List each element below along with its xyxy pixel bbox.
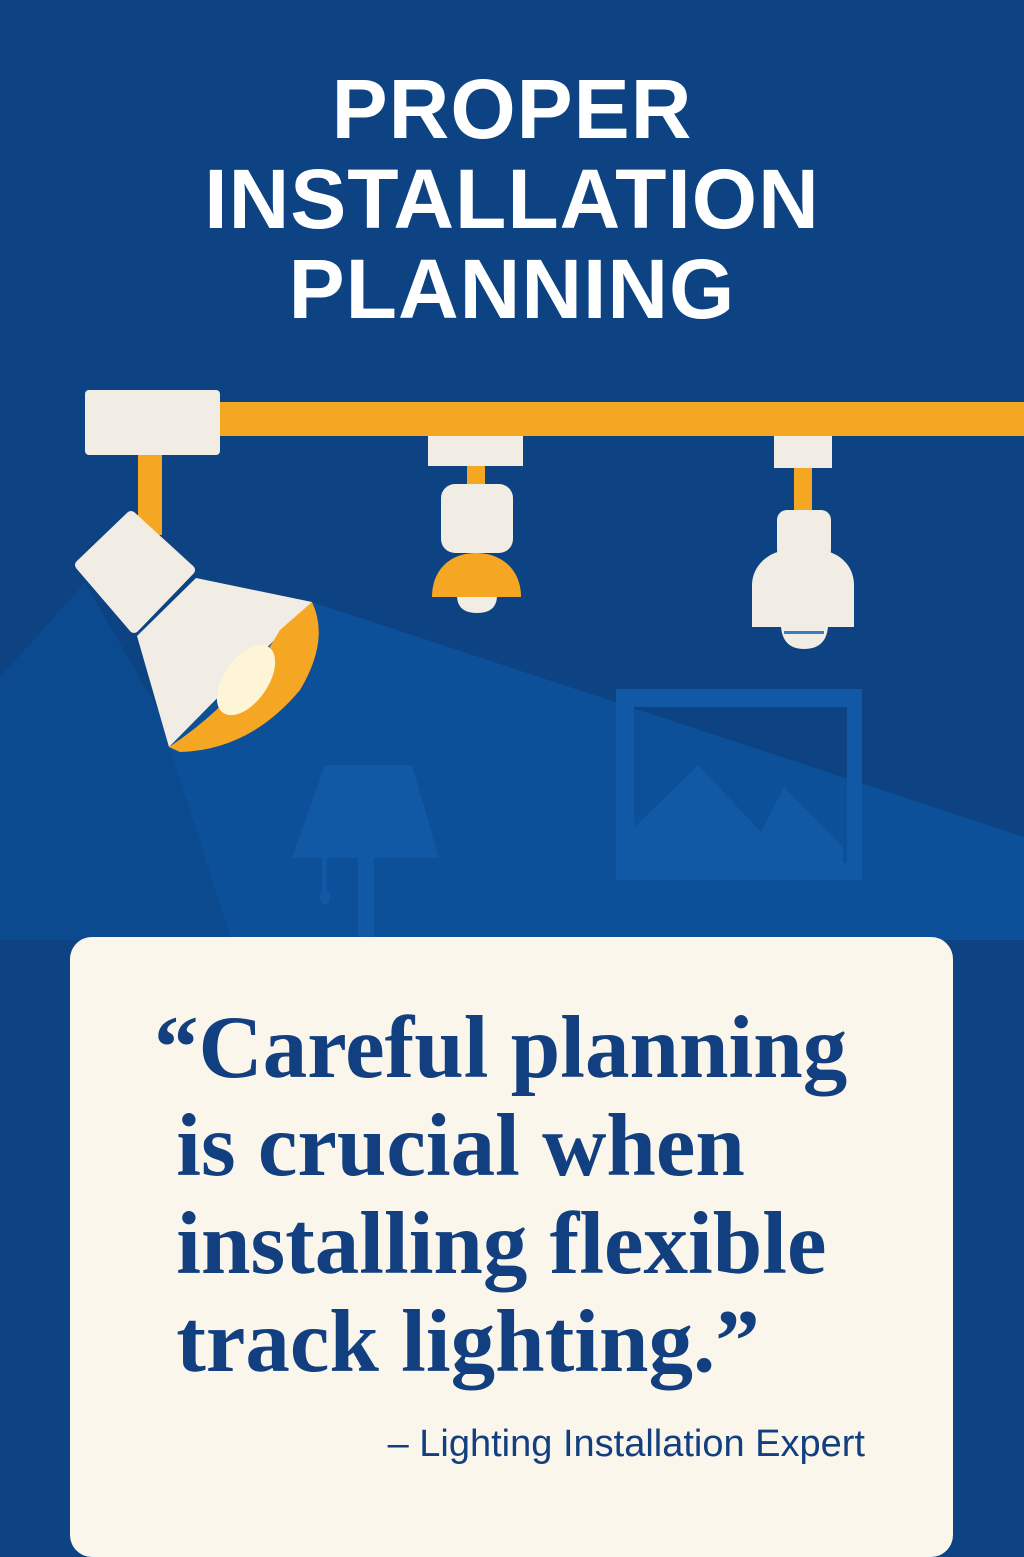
title: PLANNING	[289, 242, 735, 336]
quote card	[70, 937, 953, 1557]
pendant middle	[428, 436, 523, 613]
illustration: track lighting	[0, 390, 1024, 940]
quote text: “Careful planning	[154, 999, 847, 1097]
track	[215, 402, 1024, 436]
picture frame	[616, 689, 862, 880]
quote text: track lighting.”	[176, 1293, 760, 1391]
quote text: installing flexible	[176, 1195, 826, 1293]
light beam	[0, 583, 1024, 940]
title	[204, 62, 820, 336]
title: INSTALLATION	[204, 152, 820, 246]
title: PROPER	[332, 62, 692, 156]
floor lamp silhouette	[292, 765, 439, 938]
pendant right	[752, 436, 854, 649]
quote text: is crucial when	[176, 1097, 745, 1195]
spotlight left	[80, 455, 319, 752]
attribution: – Lighting Installation Expert	[388, 1423, 865, 1465]
quote text	[154, 999, 847, 1391]
